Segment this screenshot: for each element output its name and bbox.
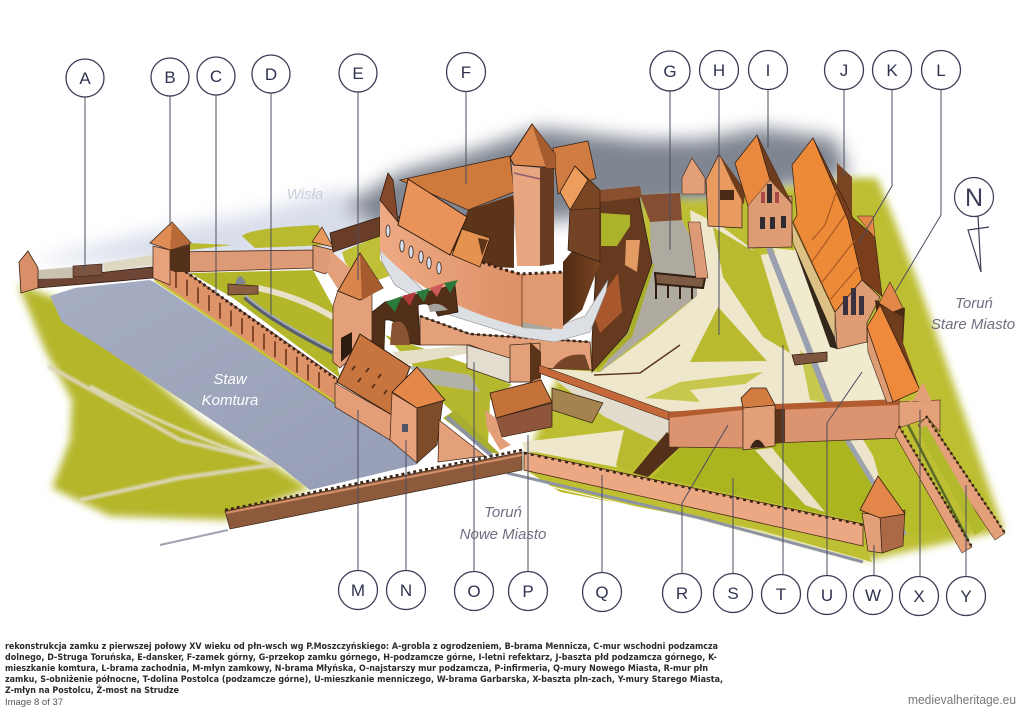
upper bailey stream (769, 248, 830, 403)
top markers A–L (66, 50, 960, 97)
courtyard shadow (450, 195, 514, 268)
R: north wall and gate tower (669, 388, 900, 450)
top markers A–L: D (265, 65, 277, 84)
north depression field (653, 440, 880, 522)
bottom markers M–Y: U (821, 586, 833, 605)
site credit: medievalheritage.eu (908, 692, 1016, 707)
moat bridge (655, 273, 705, 299)
place name: Toruń Stare Miasto (931, 295, 1015, 333)
arcade (792, 222, 835, 340)
main tower (512, 165, 540, 266)
caption: Z-młyn na Postolcu, Ż-most na Strudze (5, 685, 179, 695)
place name: Staw Komtura: Komtura (202, 392, 258, 409)
pond: Staw Komtura (50, 280, 418, 490)
top markers A–L: K (886, 61, 898, 80)
H: upper bailey gatehouse (682, 154, 745, 228)
back roofs (400, 156, 514, 210)
lower bailey ground (522, 430, 627, 467)
small turret (682, 158, 705, 194)
upper bailey footbridge (792, 352, 827, 365)
compass: north arrow (954, 178, 994, 272)
bottom markers M–Y: O (467, 582, 481, 601)
place name: Staw Komtura: Staw (213, 371, 248, 388)
top markers A–L: C (210, 67, 222, 86)
place name: Wisła: Wisła (287, 186, 323, 203)
main castle grounds (522, 178, 1004, 560)
compass: north arrow: N (965, 184, 983, 212)
small tower on east wall (312, 227, 352, 292)
leader lines (85, 89, 966, 577)
lower stream and grass strip (507, 470, 872, 563)
grass behind oldest wall (385, 335, 512, 445)
caption: mieszkanie komtura, L-brama zachodnia, M-młyn zamkowy, N-brama Młyńska, O-najstarszy mur podzamcza, P-infirmeria, Q-mury Nowego Miasta, R-mur płn (5, 663, 708, 673)
stepped gable (380, 173, 398, 222)
NE corner and walls X, Y (895, 400, 1005, 553)
left bank grass (18, 284, 310, 520)
tower and causeway A (19, 251, 153, 293)
top markers A–L: B (164, 68, 176, 87)
stream: Struga Toruńska (228, 276, 333, 352)
plinth (380, 248, 608, 342)
side walls by the moat (688, 222, 708, 278)
W: Tanners gate (860, 476, 905, 553)
top markers A–L: I (766, 61, 770, 80)
lower wall below castle (420, 316, 592, 370)
bottom markers M–Y: Y (960, 587, 972, 606)
banner (386, 280, 458, 312)
place name: Staw Komtura (202, 371, 258, 409)
M: mill building (335, 334, 410, 440)
top markers A–L: E (352, 64, 364, 83)
pond wall with buttresses (155, 250, 395, 442)
grass in upper bailey (713, 227, 790, 353)
top moat wall (640, 193, 682, 222)
bottom markers M–Y: W (865, 586, 881, 605)
road and stream by main house (773, 248, 890, 403)
bottom markers M–Y: Q (595, 583, 609, 602)
bottom markers M–Y: N (400, 581, 412, 600)
place name: Toruń Stare Miasto: Toruń (955, 295, 993, 312)
Q: New Town wall (524, 452, 863, 546)
wall and stream below Mill gate (438, 410, 500, 462)
diagonal wall to lower bailey (539, 365, 680, 477)
J/K: main house with long roof (792, 138, 882, 349)
bottom markers M–Y (338, 570, 986, 616)
tower body (333, 290, 372, 368)
bottom markers M–Y: T (776, 585, 786, 604)
grey section: oldest wall O (467, 342, 541, 383)
top markers A–L: G (663, 62, 677, 81)
I: summer refectory (735, 135, 792, 248)
L: west gate (875, 282, 905, 345)
caption: dolnego, D-Struga Toruńska, E-dansker, F-zamek górny, G-przekop zamku górnego, H-podzamcze górne, I-letni refektarz, J-baszta płd podzamcza górnego, K- (5, 652, 717, 662)
place name: Toruń Nowe Miasto: Nowe Miasto (460, 526, 546, 543)
top markers A–L: A (79, 69, 91, 88)
image counter: Image 8 of 37 (5, 697, 63, 708)
far bank grass patches (188, 225, 392, 286)
U: Mint residence (867, 305, 932, 403)
tower roof (338, 253, 383, 300)
side gatehouse (568, 200, 600, 262)
arc wall (380, 200, 522, 327)
P: infirmary (485, 380, 603, 450)
caption (5, 641, 723, 695)
bottom markers M–Y: S (727, 584, 739, 603)
caption: rekonstrukcja zamku z pierwszej połowy XV wieku od płn-wsch wg P.Moszczyńskiego: A-grobla z ogrodzeniem, B-brama Mennicza, C-mur wschodni podzamcza (5, 641, 718, 651)
caption: zamku, S-obniżenie północne, T-dolina Postolca (podzamcze górne), U-mieszkanie menniczego, W-brama Garbarska, X-baszta płn-zach, Y-mury Starego Miasta, (5, 674, 723, 684)
rear wall toward castle (330, 217, 380, 252)
left roof (398, 179, 467, 255)
moat of upper castle (600, 220, 697, 372)
lower castle ground strip (190, 270, 340, 378)
E tower and bridge (333, 253, 458, 368)
bottom markers M–Y: P (522, 582, 534, 601)
F: upper castle (380, 124, 608, 342)
gable wall (835, 280, 880, 349)
bottom markers M–Y: R (676, 584, 688, 603)
tower B: Mint gate (150, 222, 191, 285)
place name: Toruń Nowe Miasto (460, 504, 546, 543)
bottom markers M–Y: M (351, 581, 365, 600)
bridge structure (362, 285, 458, 350)
top markers A–L: F (461, 63, 471, 82)
top markers A–L: J (840, 61, 848, 80)
place name: Toruń Nowe Miasto: Toruń (484, 504, 522, 521)
bottom markers M–Y: X (913, 587, 925, 606)
east wall of lower bailey C (170, 250, 313, 272)
N: Mill gate (390, 367, 445, 463)
windows (386, 225, 441, 274)
top markers A–L: H (713, 61, 725, 80)
background haze: Wisła river (30, 128, 850, 262)
place name: Toruń Stare Miasto: Stare Miasto (931, 316, 1015, 333)
top markers A–L: L (936, 61, 946, 80)
lower fortifications right of upper castle (592, 186, 708, 372)
dam wall (160, 450, 522, 545)
